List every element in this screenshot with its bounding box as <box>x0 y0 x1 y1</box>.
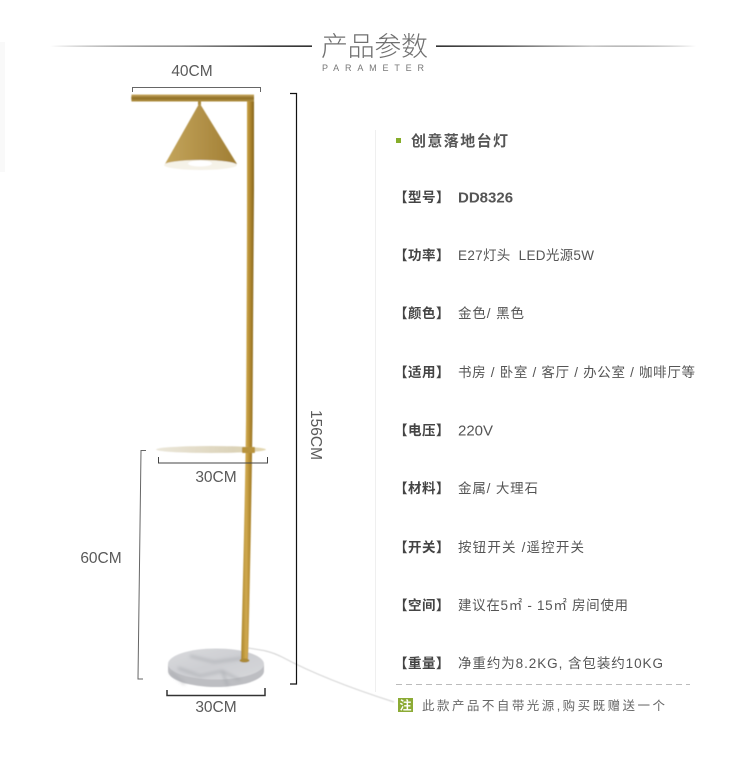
row: space: 建议在5㎡ - 15㎡ 房间使用 <box>458 597 628 613</box>
row: material <box>394 480 538 496</box>
title: 产品参数 <box>321 25 428 64</box>
dimension: 40CM <box>132 63 260 92</box>
dimension: 40CM: 40CM <box>171 63 213 80</box>
lamp pole <box>241 95 254 661</box>
header rule left <box>50 46 312 47</box>
lamp cord <box>248 648 394 702</box>
dimension: tray 30CM <box>158 457 268 486</box>
panel: specifications <box>394 132 695 671</box>
row: weight: 【重量】 <box>394 656 450 671</box>
row: voltage: 【电压】 <box>394 423 450 438</box>
side tray <box>156 446 266 453</box>
row: switch <box>394 539 584 555</box>
dimension: base 30CM: 30CM <box>195 699 237 716</box>
specification divider <box>375 130 376 692</box>
row: colour: 【颜色】 <box>394 305 450 321</box>
lamp marble base <box>168 648 264 687</box>
row: power: E27灯头 LED光源5W <box>458 248 594 263</box>
dimension: tray 30CM: 30CM <box>195 469 237 486</box>
row: model <box>394 190 513 206</box>
row: space <box>394 597 628 613</box>
row: power: 【功率】 <box>394 247 450 263</box>
row: colour <box>394 305 524 321</box>
subtitle: PARAMETER <box>322 63 424 73</box>
note badge <box>398 698 413 712</box>
row: model: DD8326 <box>458 190 513 206</box>
dimension: 156CM <box>290 94 324 684</box>
header rule right <box>436 46 696 47</box>
row: switch: 按钮开关 /遥控开关 <box>458 540 584 555</box>
row: power <box>394 247 594 263</box>
row: material: 金属/ 大理石 <box>458 481 538 496</box>
lamp shade <box>164 100 237 170</box>
row: switch: 【开关】 <box>394 539 450 555</box>
row: usage: 书房 / 卧室 / 客厅 / 办公室 / 咖啡厅等 <box>458 364 695 380</box>
note: 此款产品不自带光源,购买既赠送一个 <box>422 698 665 713</box>
row: material: 【材料】 <box>394 480 450 496</box>
dashed divider <box>396 684 690 686</box>
product name: 创意落地台灯 <box>411 132 508 150</box>
row: weight: 净重约为8.2KG, 含包装约10KG <box>458 656 663 671</box>
row: voltage: 220V <box>458 422 493 440</box>
dimension: 156CM: 156CM <box>307 410 324 460</box>
dimension: base 30CM <box>167 688 265 716</box>
row: usage: 【适用】 <box>394 365 450 380</box>
row: model: 【型号】 <box>394 190 450 205</box>
lamp illustration <box>131 94 394 702</box>
row: colour: 金色/ 黑色 <box>458 305 524 321</box>
lamp arm <box>131 94 254 102</box>
dimension: 60CM <box>80 450 146 679</box>
left edge strip <box>0 42 5 172</box>
note: 注 <box>399 698 412 712</box>
dimension: 60CM: 60CM <box>80 550 122 567</box>
row: space: 【空间】 <box>394 597 450 613</box>
row: voltage <box>394 422 493 440</box>
